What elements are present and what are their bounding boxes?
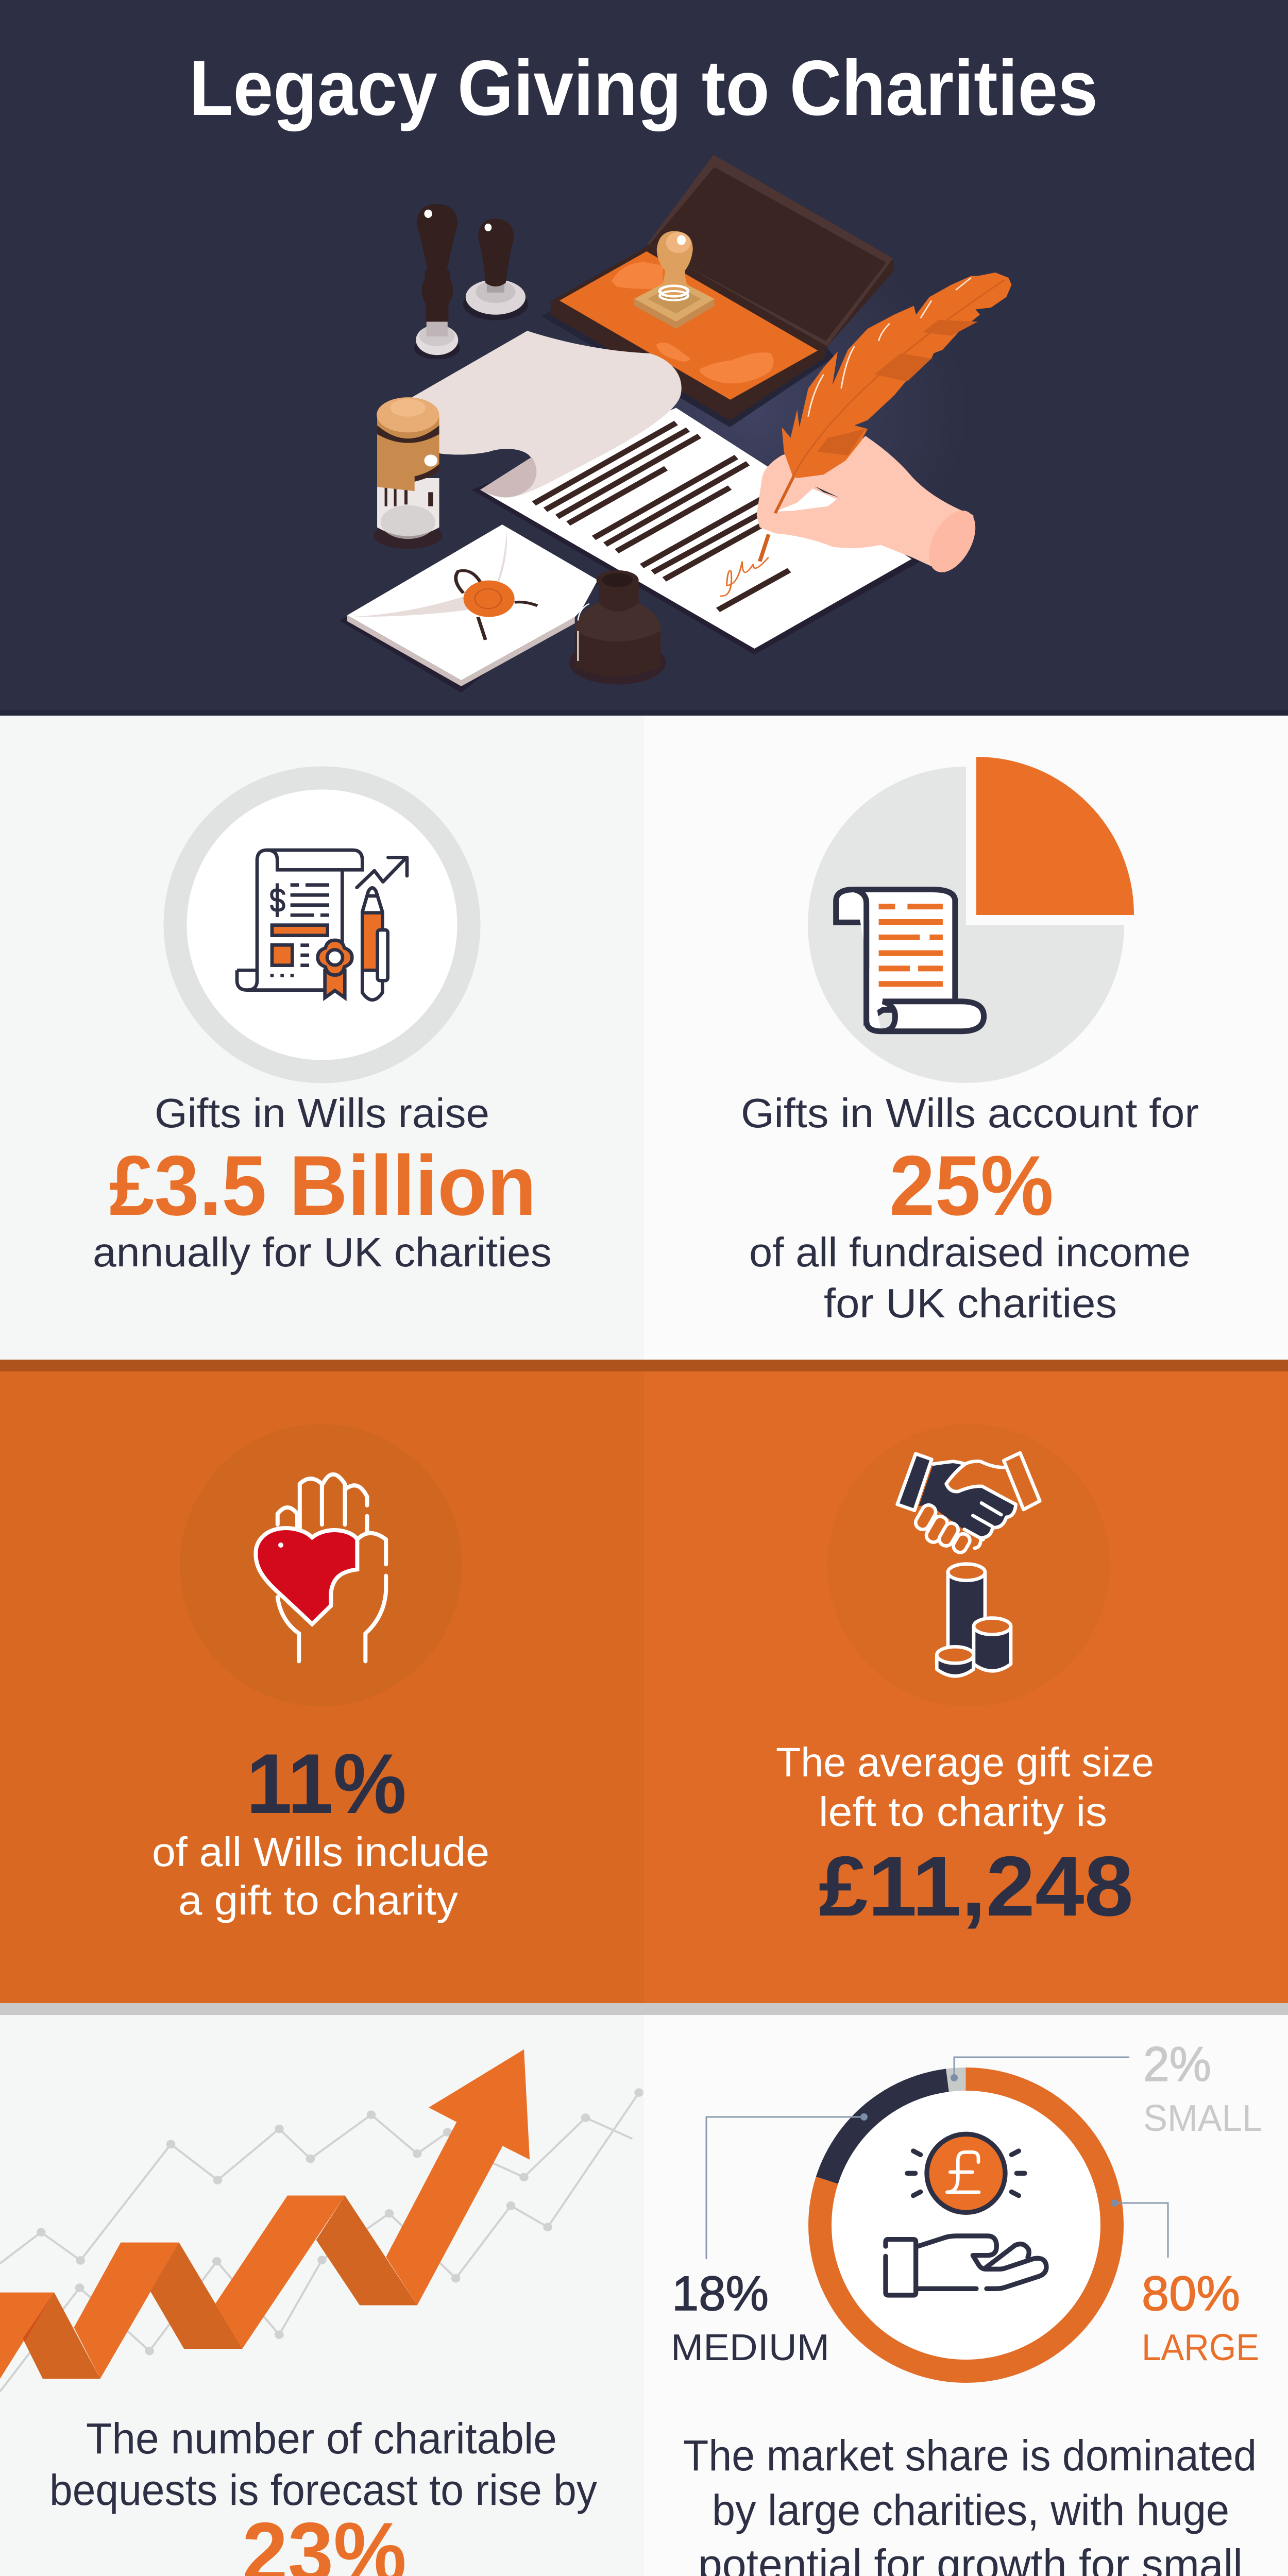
text: charitable bequests: [49, 2414, 597, 2576]
panel: header: [0, 0, 1288, 716]
text: market share: The market share is dominated: [683, 2431, 1257, 2480]
text: market share: [683, 2431, 1257, 2576]
icon: ink bottle: [569, 570, 666, 685]
text: gifts raise: [93, 1090, 552, 1275]
stat: 11 percent: 11%: [246, 1736, 406, 1831]
label: medium: [671, 2266, 829, 2368]
text: charitable bequests: bequests is forecast to rise by: [49, 2466, 597, 2514]
illustration: will writing desk: [340, 155, 1012, 692]
label: small: SMALL: [1143, 2098, 1262, 2139]
text: average gift: left to charity is: [819, 1789, 1107, 1835]
text: fundraised income: for UK charities: [824, 1280, 1117, 1326]
icon: wooden stamp: [634, 231, 715, 329]
label: small: [1143, 2037, 1262, 2139]
icon: pound coin over hand: [886, 2134, 1046, 2295]
chart: pie 25 percent with scroll: [808, 757, 1134, 1083]
chart: donut market share: [820, 2079, 1112, 2371]
chart: rising arrow with trend lines: [0, 2049, 643, 2392]
icon: rolled scroll tube: [374, 397, 443, 549]
curled paper: [412, 331, 682, 498]
text: gifts account: Gifts in Wills account for: [741, 1090, 1199, 1136]
icon: hand holding heart: [180, 1424, 462, 1706]
title: Legacy Giving to Charities: [189, 44, 1098, 132]
text: gifts raise: annually for UK charities: [93, 1229, 552, 1275]
label: large: 80%: [1142, 2266, 1240, 2321]
icon: quill feather: [760, 273, 1012, 562]
panel: stats row one: [0, 716, 1288, 1371]
text: gifts raise: Gifts in Wills raise: [155, 1090, 489, 1136]
text: of all wills: a gift to charity: [178, 1877, 458, 1923]
icon: hand: [757, 436, 985, 577]
icon: short seal stamp: [463, 218, 528, 320]
label: large: [1142, 2266, 1259, 2368]
text: charitable bequests: The number of charitable: [86, 2414, 557, 2463]
label: small: 2%: [1143, 2037, 1211, 2092]
stat: 11,248: £11,248: [819, 1839, 1133, 1934]
text: fundraised income: [749, 1229, 1191, 1326]
stat: 3.5 billion: £3.5 Billion: [109, 1138, 536, 1233]
text: of all wills: of all Wills include: [152, 1829, 489, 1875]
stat: 25 percent: 25%: [889, 1138, 1054, 1233]
document: [471, 408, 921, 655]
text: average gift: The average gift size: [776, 1739, 1154, 1785]
text: of all wills: [152, 1829, 489, 1923]
icon: sealed envelope: [340, 524, 599, 692]
label: medium: MEDIUM: [671, 2327, 829, 2368]
text: market share: by large charities, with huge: [712, 2486, 1229, 2534]
icon: handshake and coins: [827, 1424, 1110, 1706]
icon: open stamp box: [542, 155, 894, 427]
icon: ring with will document: [175, 778, 469, 1072]
label: medium: 18%: [672, 2266, 769, 2321]
panel: stats row two: [0, 1371, 1288, 2015]
label: large: LARGE: [1142, 2327, 1259, 2368]
icon: tall seal stamp: [414, 204, 460, 359]
leader lines: [706, 2057, 1168, 2259]
text: average gift: [776, 1739, 1154, 1835]
panel: stats row three: [0, 2015, 1288, 2576]
text: fundraised income: of all fundraised income: [749, 1229, 1191, 1275]
